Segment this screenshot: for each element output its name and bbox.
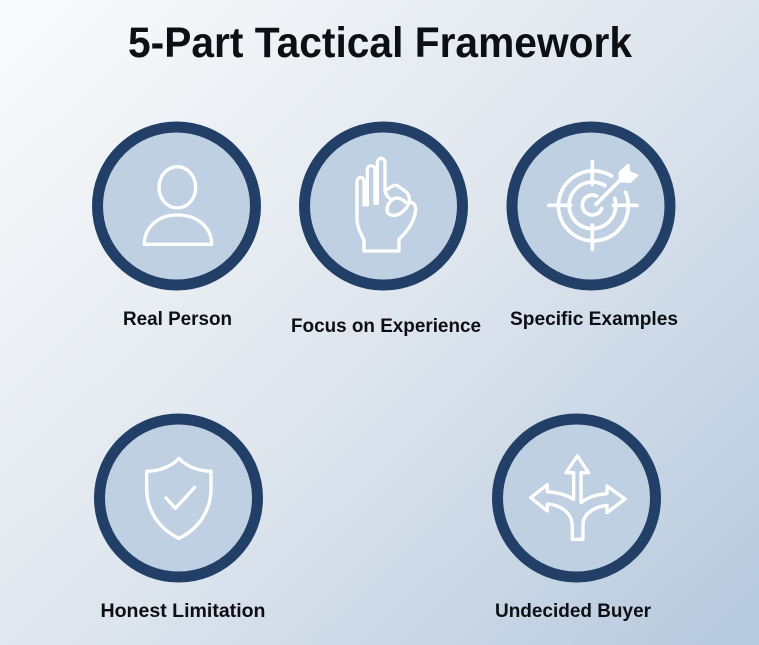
icon: hand [304, 127, 462, 285]
icon: three-way arrows [498, 419, 656, 577]
icon: target with arrow [512, 127, 670, 285]
item: Specific Examples [510, 127, 678, 330]
label: Focus on Experience: Focus on Experience [291, 315, 481, 337]
label: Specific Examples: Specific Examples [510, 308, 678, 330]
title: 5-Part Tactical Framework [128, 20, 632, 67]
item: Undecided Buyer [495, 419, 656, 622]
item: Honest Limitation [100, 419, 266, 622]
item: Focus on Experience [291, 127, 481, 337]
icon: shield with check [100, 419, 258, 577]
label: Undecided Buyer: Undecided Buyer [495, 600, 651, 622]
icon: person [98, 127, 256, 285]
item: Real Person [98, 127, 256, 330]
label: Honest Limitation: Honest Limitation [100, 600, 266, 622]
label: Real Person: Real Person [123, 308, 232, 330]
